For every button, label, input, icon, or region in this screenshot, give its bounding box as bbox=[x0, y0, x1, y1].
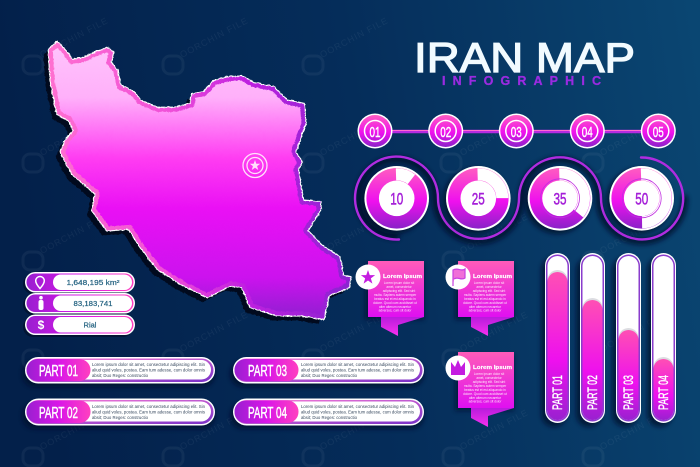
part 03 banner: absit; Duo Reges: constructio bbox=[301, 373, 358, 378]
watermark labels: OORCHIN FILE bbox=[178, 113, 250, 158]
card: star: adversus, cum sit dolor bbox=[379, 308, 412, 312]
title: IRAN MAP bbox=[414, 34, 635, 81]
card: star bbox=[356, 261, 424, 336]
watermark labels: OORCHIN FILE bbox=[458, 113, 530, 158]
watermark labels: OORCHIN FILE bbox=[38, 15, 110, 60]
vertical bar: part 04: PART 04 bbox=[655, 375, 671, 410]
donut: 25: 25 bbox=[472, 190, 485, 208]
card: flag: alter alterum necaretur bbox=[469, 305, 502, 309]
vertical bar: part 01 bbox=[541, 253, 570, 427]
card: crown: amet, consectetur bbox=[476, 376, 503, 380]
card: crown: multa. Sapiens autem semper bbox=[464, 384, 507, 388]
card: star: adipiscing elit. Sed sint bbox=[383, 289, 415, 293]
step 01: 01 bbox=[370, 124, 380, 141]
card: crown: adipiscing elit. Sed sint bbox=[473, 380, 505, 384]
step 02: 02 bbox=[440, 124, 451, 141]
watermark labels: OORCHIN FILE bbox=[318, 15, 390, 60]
part 03 banner: aliud quid voles, postea. Eam tum adesse, cum dolor omnis bbox=[301, 368, 414, 372]
part 01 banner: Lorem ipsum dolor sit amet, consectetur adipiscing elit. Sin bbox=[92, 362, 206, 367]
watermark labels: OORCHIN FILE bbox=[178, 309, 250, 354]
part 03 banner bbox=[230, 357, 424, 387]
part 04 banner: Lorem ipsum dolor sit amet, consectetur adipiscing elit. Sin bbox=[301, 404, 415, 409]
card: crown bbox=[446, 352, 514, 427]
donut: 35: 35 bbox=[554, 190, 566, 208]
watermark labels: OORCHIN FILE bbox=[178, 407, 250, 452]
donut: 35 bbox=[524, 166, 592, 234]
watermark labels: OORCHIN FILE bbox=[598, 407, 670, 452]
card: flag: Lorem ipsum dolor sit bbox=[474, 281, 504, 285]
stat: area: 1,648,195 km² bbox=[66, 278, 120, 287]
part 01 banner: aliud quid voles, postea. Eam tum adesse, cum dolor omnis bbox=[92, 368, 205, 372]
watermark labels: OORCHIN FILE bbox=[38, 113, 110, 158]
part 04 banner: absit; Duo Reges: constructio bbox=[301, 415, 358, 420]
card: crown: Lorem ipsum dolor sit bbox=[474, 372, 504, 376]
part 02 banner: absit; Duo Reges: constructio bbox=[92, 415, 149, 420]
step 02 bbox=[428, 114, 463, 148]
watermark labels: OORCHIN FILE bbox=[318, 407, 390, 452]
card: star: amet, consectetur bbox=[386, 285, 413, 289]
part 04 banner bbox=[230, 398, 424, 429]
step 03: 03 bbox=[511, 124, 522, 141]
vertical bar: part 04 bbox=[647, 253, 676, 427]
vertical bar: part 03 bbox=[612, 253, 641, 427]
wave connector bbox=[355, 157, 685, 241]
card: crown: dolore. Quod cum accidisset ut bbox=[463, 392, 507, 396]
card: star: dolore. Quod cum accidisset ut bbox=[373, 301, 417, 305]
watermark labels: OORCHIN FILE bbox=[178, 211, 250, 256]
donut: 10: 10 bbox=[390, 190, 403, 208]
stat: population: 83,183,741 bbox=[74, 299, 112, 308]
watermark labels: OORCHIN FILE bbox=[318, 309, 390, 354]
watermark labels: OORCHIN FILE bbox=[598, 113, 670, 158]
part 01 banner: PART 01 bbox=[39, 363, 78, 380]
step 05: 05 bbox=[653, 124, 664, 141]
stat: currency: $ bbox=[38, 318, 45, 332]
watermark labels: OORCHIN FILE bbox=[38, 407, 110, 452]
card: star: beatus est et est aliquando in bbox=[374, 297, 416, 301]
watermark labels: OORCHIN FILE bbox=[598, 309, 670, 354]
card: flag: adipiscing elit. Sed sint bbox=[473, 289, 505, 293]
card: crown: adversus, cum sit dolor bbox=[469, 400, 502, 404]
part 04 banner: aliud quid voles, postea. Eam tum adesse, cum dolor omnis bbox=[301, 410, 414, 414]
card: star: alter alterum necaretur bbox=[379, 305, 412, 309]
vertical bar: part 02 bbox=[576, 253, 605, 427]
card: flag: multa. Sapiens autem semper bbox=[464, 293, 507, 297]
part 02 banner: PART 02 bbox=[39, 405, 78, 422]
part 02 banner: Lorem ipsum dolor sit amet, consectetur adipiscing elit. Sin bbox=[92, 404, 206, 409]
vertical bar: part 03: PART 03 bbox=[620, 375, 636, 410]
vertical bar: part 02: PART 02 bbox=[584, 375, 600, 410]
watermark labels: OORCHIN FILE bbox=[458, 309, 530, 354]
watermark labels: OORCHIN FILE bbox=[458, 211, 530, 256]
donut: 50 bbox=[606, 166, 674, 234]
card: flag: adversus, cum sit dolor bbox=[469, 308, 502, 312]
watermark pattern bbox=[23, 56, 603, 466]
watermark labels: OORCHIN FILE bbox=[318, 211, 390, 256]
stat: currency bbox=[23, 314, 135, 337]
map: Iran bbox=[43, 42, 350, 323]
part 04 banner: PART 04 bbox=[248, 405, 287, 422]
step 05 bbox=[641, 114, 676, 148]
watermark labels: OORCHIN FILE bbox=[458, 407, 530, 452]
stat: population bbox=[23, 293, 135, 315]
card: flag: dolore. Quod cum accidisset ut bbox=[463, 301, 507, 305]
donut: 25 bbox=[443, 166, 511, 234]
card: star: Lorem Ipsum bbox=[383, 274, 422, 280]
subtitle: INFOGRAPHIC bbox=[442, 74, 601, 88]
card: star: Lorem ipsum dolor sit bbox=[384, 281, 414, 285]
watermark labels: OORCHIN FILE bbox=[38, 211, 110, 256]
part 02 banner: aliud quid voles, postea. Eam tum adesse, cum dolor omnis bbox=[92, 410, 205, 414]
donut: 50: 50 bbox=[635, 190, 648, 208]
part 02 banner bbox=[22, 398, 215, 429]
card: crown: Lorem Ipsum bbox=[473, 365, 512, 371]
step 01 bbox=[358, 114, 392, 148]
card: flag bbox=[446, 261, 514, 336]
watermark labels: OORCHIN FILE bbox=[598, 211, 670, 256]
stat: area bbox=[23, 272, 135, 294]
card: flag: amet, consectetur bbox=[476, 285, 503, 289]
part 01 banner bbox=[22, 357, 215, 387]
watermark labels: OORCHIN FILE bbox=[318, 113, 390, 158]
card: crown: alter alterum necaretur bbox=[469, 396, 502, 400]
part 03 banner: PART 03 bbox=[248, 363, 287, 380]
timeline steps 01-05 bbox=[358, 114, 676, 148]
part 03 banner: Lorem ipsum dolor sit amet, consectetur adipiscing elit. Sin bbox=[301, 362, 415, 367]
step 04: 04 bbox=[582, 124, 593, 141]
step 04 bbox=[570, 114, 605, 148]
part 01 banner: absit; Duo Reges: constructio bbox=[92, 373, 149, 378]
card: flag: beatus est et est aliquando in bbox=[464, 297, 506, 301]
card: crown: beatus est et est aliquando in bbox=[464, 388, 506, 392]
vertical bar: part 01: PART 01 bbox=[549, 375, 565, 410]
donut: 10 bbox=[361, 166, 429, 234]
watermark labels: OORCHIN FILE bbox=[178, 15, 250, 60]
step 03 bbox=[499, 114, 534, 148]
icon: capital star marker bbox=[243, 154, 267, 178]
stat: currency: Rial bbox=[84, 321, 97, 330]
card: star: multa. Sapiens autem semper bbox=[374, 293, 417, 297]
card: flag: Lorem Ipsum bbox=[473, 274, 512, 280]
